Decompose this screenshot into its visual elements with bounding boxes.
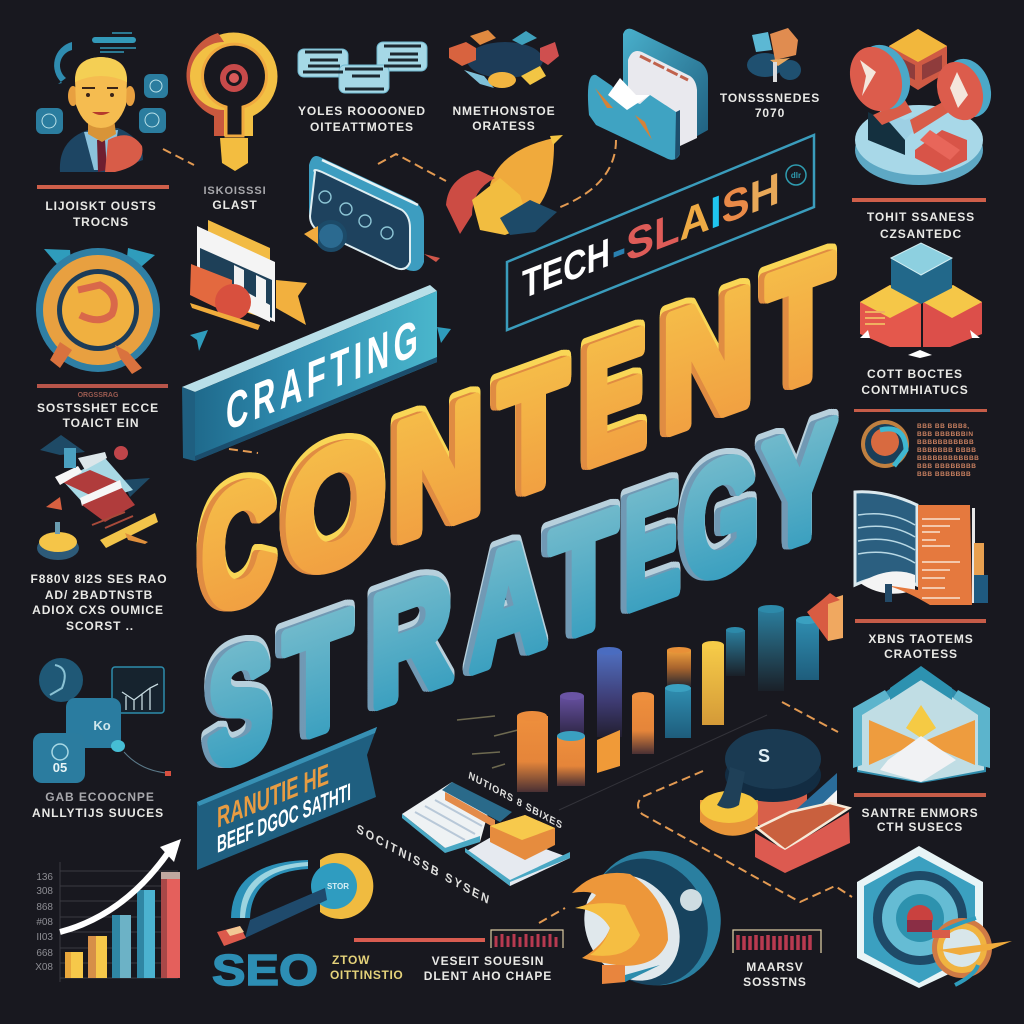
label: paragraph left: AD/ 2BADTNSTB: [45, 588, 153, 602]
main title: CONTENT: O: [285, 397, 386, 618]
banner: bottom ribbon: [197, 727, 377, 870]
central cylinder bar chart: [457, 593, 843, 810]
icon: open book: [855, 492, 988, 605]
main title: STRATEGY: T: [550, 477, 617, 676]
skewed caption: above planner: NUTIORS 8 SBIXES: [467, 770, 563, 832]
icon: small dial with paragraph: BBB BBBBBBIN: [917, 431, 974, 438]
icon: rocket: [446, 135, 563, 235]
icon: message cards: [298, 42, 427, 93]
label: SEO: SEO: [212, 946, 318, 995]
icon: SEO gauge: [217, 853, 373, 946]
label: platform: TOHIT SSANESS: [867, 210, 975, 224]
label: vesEIT caption with mini bars: [354, 930, 563, 983]
label: three cubes: COTT BOCTES: [867, 367, 963, 381]
icon: hex target: [857, 846, 1012, 988]
icon: lightbulb: [186, 33, 278, 171]
bar chart with arrow: 308: [36, 886, 53, 897]
label: hexagon: SANTRE ENMORS: [861, 806, 979, 820]
main title: CONTENT: T: [767, 221, 834, 429]
label: ring of cubes: [452, 104, 556, 133]
icon: small dial with paragraph: BBBBBBB BBBB: [917, 447, 976, 454]
label: top left: [37, 185, 169, 229]
bar chart with arrow: 136: [36, 872, 53, 883]
bar chart with arrow: 868: [36, 902, 53, 913]
main title: STRATEGY: S: [208, 606, 273, 804]
label: vesEIT caption with mini bars: VESEIT SOUESIN: [432, 954, 544, 968]
icon: analytics cubes and chart: Ko: [93, 718, 111, 733]
main title: CONTENT: E: [584, 294, 647, 501]
icon: small tools cluster: [747, 28, 801, 82]
label: lightbulb: GLAST: [212, 198, 258, 212]
label: analytics: [32, 790, 164, 820]
label: small tools: 7070: [755, 106, 785, 120]
skewed caption: left of planner: SOCITNISSB SYSEN: [355, 821, 490, 907]
main title: CONTENT: [202, 221, 834, 651]
label: ring of cubes: ORATESS: [472, 119, 536, 133]
icon: businessman portrait: [36, 33, 168, 172]
bar chart with arrow: [35, 839, 181, 982]
mini bars and label: markets: [733, 930, 821, 989]
main title: STRATEGY: [208, 387, 836, 804]
label: paragraph left: F880V 8I2S SES RAO: [31, 572, 167, 586]
label: platform: [852, 198, 986, 241]
label: vesEIT caption with mini bars: DLENT AHO CHAPE: [424, 969, 552, 983]
icon: planner sheets: [402, 782, 570, 886]
icon: orange cone dial: [565, 827, 745, 1009]
label: hexagon: CTH SUSECS: [877, 820, 963, 834]
icon: small dial with paragraph: [854, 409, 987, 478]
label: hexagon: CRAOTESS: [884, 647, 958, 661]
icon: isometric desk machine: [37, 435, 158, 560]
main title: CONTENT: N: [393, 360, 484, 577]
main title: CONTENT: T: [499, 325, 568, 535]
label: SEO caption: OITTINSTIO: [330, 968, 403, 982]
label: paragraph left: [31, 572, 167, 633]
label: badge: SOSTSSHET ECCE: [37, 401, 159, 415]
mini bars and label: markets: MAARSV: [746, 960, 804, 974]
label: small tools: [720, 91, 820, 120]
label: three cubes: CONTMHIATUCS: [861, 383, 969, 397]
label: SEO caption: ZTOW: [332, 953, 370, 967]
label: badge: TOAICT EIN: [63, 416, 139, 430]
icon: small dial with paragraph: BBB BB BBB8,: [917, 423, 970, 430]
banner: CRAFTING: CRAFTING: [226, 309, 418, 443]
banner: TECH-SLASH: dlr: [791, 171, 801, 180]
icon: small arrow: [190, 330, 208, 351]
label: small tools: TONSSSNEDES: [720, 91, 820, 105]
label: platform: CZSANTEDC: [880, 227, 962, 241]
label: message cards: [298, 104, 426, 134]
bar chart with arrow: II03: [36, 932, 53, 943]
label: hexagon: [854, 619, 986, 834]
icon: circular target badge: [36, 248, 160, 374]
main title: CONTENT: N: [662, 252, 754, 470]
icon: analytics cubes and chart: 05: [53, 760, 67, 775]
bar chart with arrow: #08: [36, 917, 53, 928]
label: top left: TROCNS: [73, 215, 129, 229]
icon: three cubes: [860, 243, 982, 358]
icon: small dial with paragraph: BBBBBBBBBBBB: [917, 455, 979, 462]
main title: STRATEGY: Y: [763, 387, 836, 588]
bar chart with arrow: X08: [35, 962, 53, 973]
icon: puck and box: S: [758, 746, 770, 766]
banner: bottom ribbon: BEEF DGOC SATHTI: [217, 778, 351, 859]
icon: SEO gauge: STOR: [327, 882, 349, 891]
label: lightbulb: ISKOISSSI: [203, 185, 267, 197]
banner: CRAFTING: [182, 285, 451, 461]
icon: film card with ribbon: [190, 220, 307, 330]
label: badge: ORGSSRAG: [78, 392, 119, 399]
label: badge: [37, 384, 168, 430]
icon: folder with paper: [588, 29, 708, 160]
main title: STRATEGY: G: [683, 418, 759, 619]
dashed connector lines: [163, 140, 852, 923]
banner: TECH-SLASH: [507, 135, 814, 330]
icon: isometric platform with cube and discs: [841, 29, 999, 185]
label: message cards: YOLES ROOOONED: [298, 104, 426, 118]
icon: puck and box: [700, 729, 850, 873]
label: three cubes: [861, 367, 969, 397]
main title: STRATEGY: E: [624, 450, 680, 644]
main title: CONTENT: C: [202, 440, 277, 651]
banner: TECH-SLASH: TECH: [522, 228, 610, 308]
label: ring of cubes: NMETHONSTOE: [452, 104, 556, 118]
label: message cards: OITEATTMOTES: [310, 120, 414, 134]
icon: small dial with paragraph: BBBBBBBBBBB: [917, 439, 974, 446]
label: hexagon: XBNS TAOTEMS: [868, 632, 974, 646]
icon: ring of cubes: [449, 30, 559, 88]
main title: STRATEGY: A: [470, 501, 547, 704]
icon: device panel: [304, 156, 440, 271]
banner: TECH-SLASH: -SLAISH: [612, 163, 780, 277]
icon: small dial with paragraph: BBB BBBBBBB: [917, 471, 971, 478]
label: lightbulb: [203, 185, 267, 212]
icon: small dial with paragraph: BBB BBBBBBBB: [917, 463, 976, 470]
label: SEO caption: [330, 953, 403, 982]
label: top left: LIJOISKT OUSTS: [45, 199, 157, 213]
icon: faceted hexagon: [853, 666, 990, 783]
banner: bottom ribbon: RANUTIE HE: [217, 758, 329, 835]
label: analytics: ANLLYTIJS SUUCES: [32, 806, 164, 820]
main title: STRATEGY: T: [284, 579, 352, 777]
mini bars and label: markets: SOSSTNS: [743, 975, 807, 989]
label: paragraph left: SCORST ..: [66, 619, 134, 633]
bar chart with arrow: 668: [36, 948, 53, 959]
label: paragraph left: ADIOX CXS OUMICE: [32, 603, 164, 617]
icon: analytics cubes and chart: [33, 658, 171, 783]
label: analytics: GAB ECOOCNPE: [45, 790, 155, 804]
main title: STRATEGY: R: [370, 537, 453, 741]
